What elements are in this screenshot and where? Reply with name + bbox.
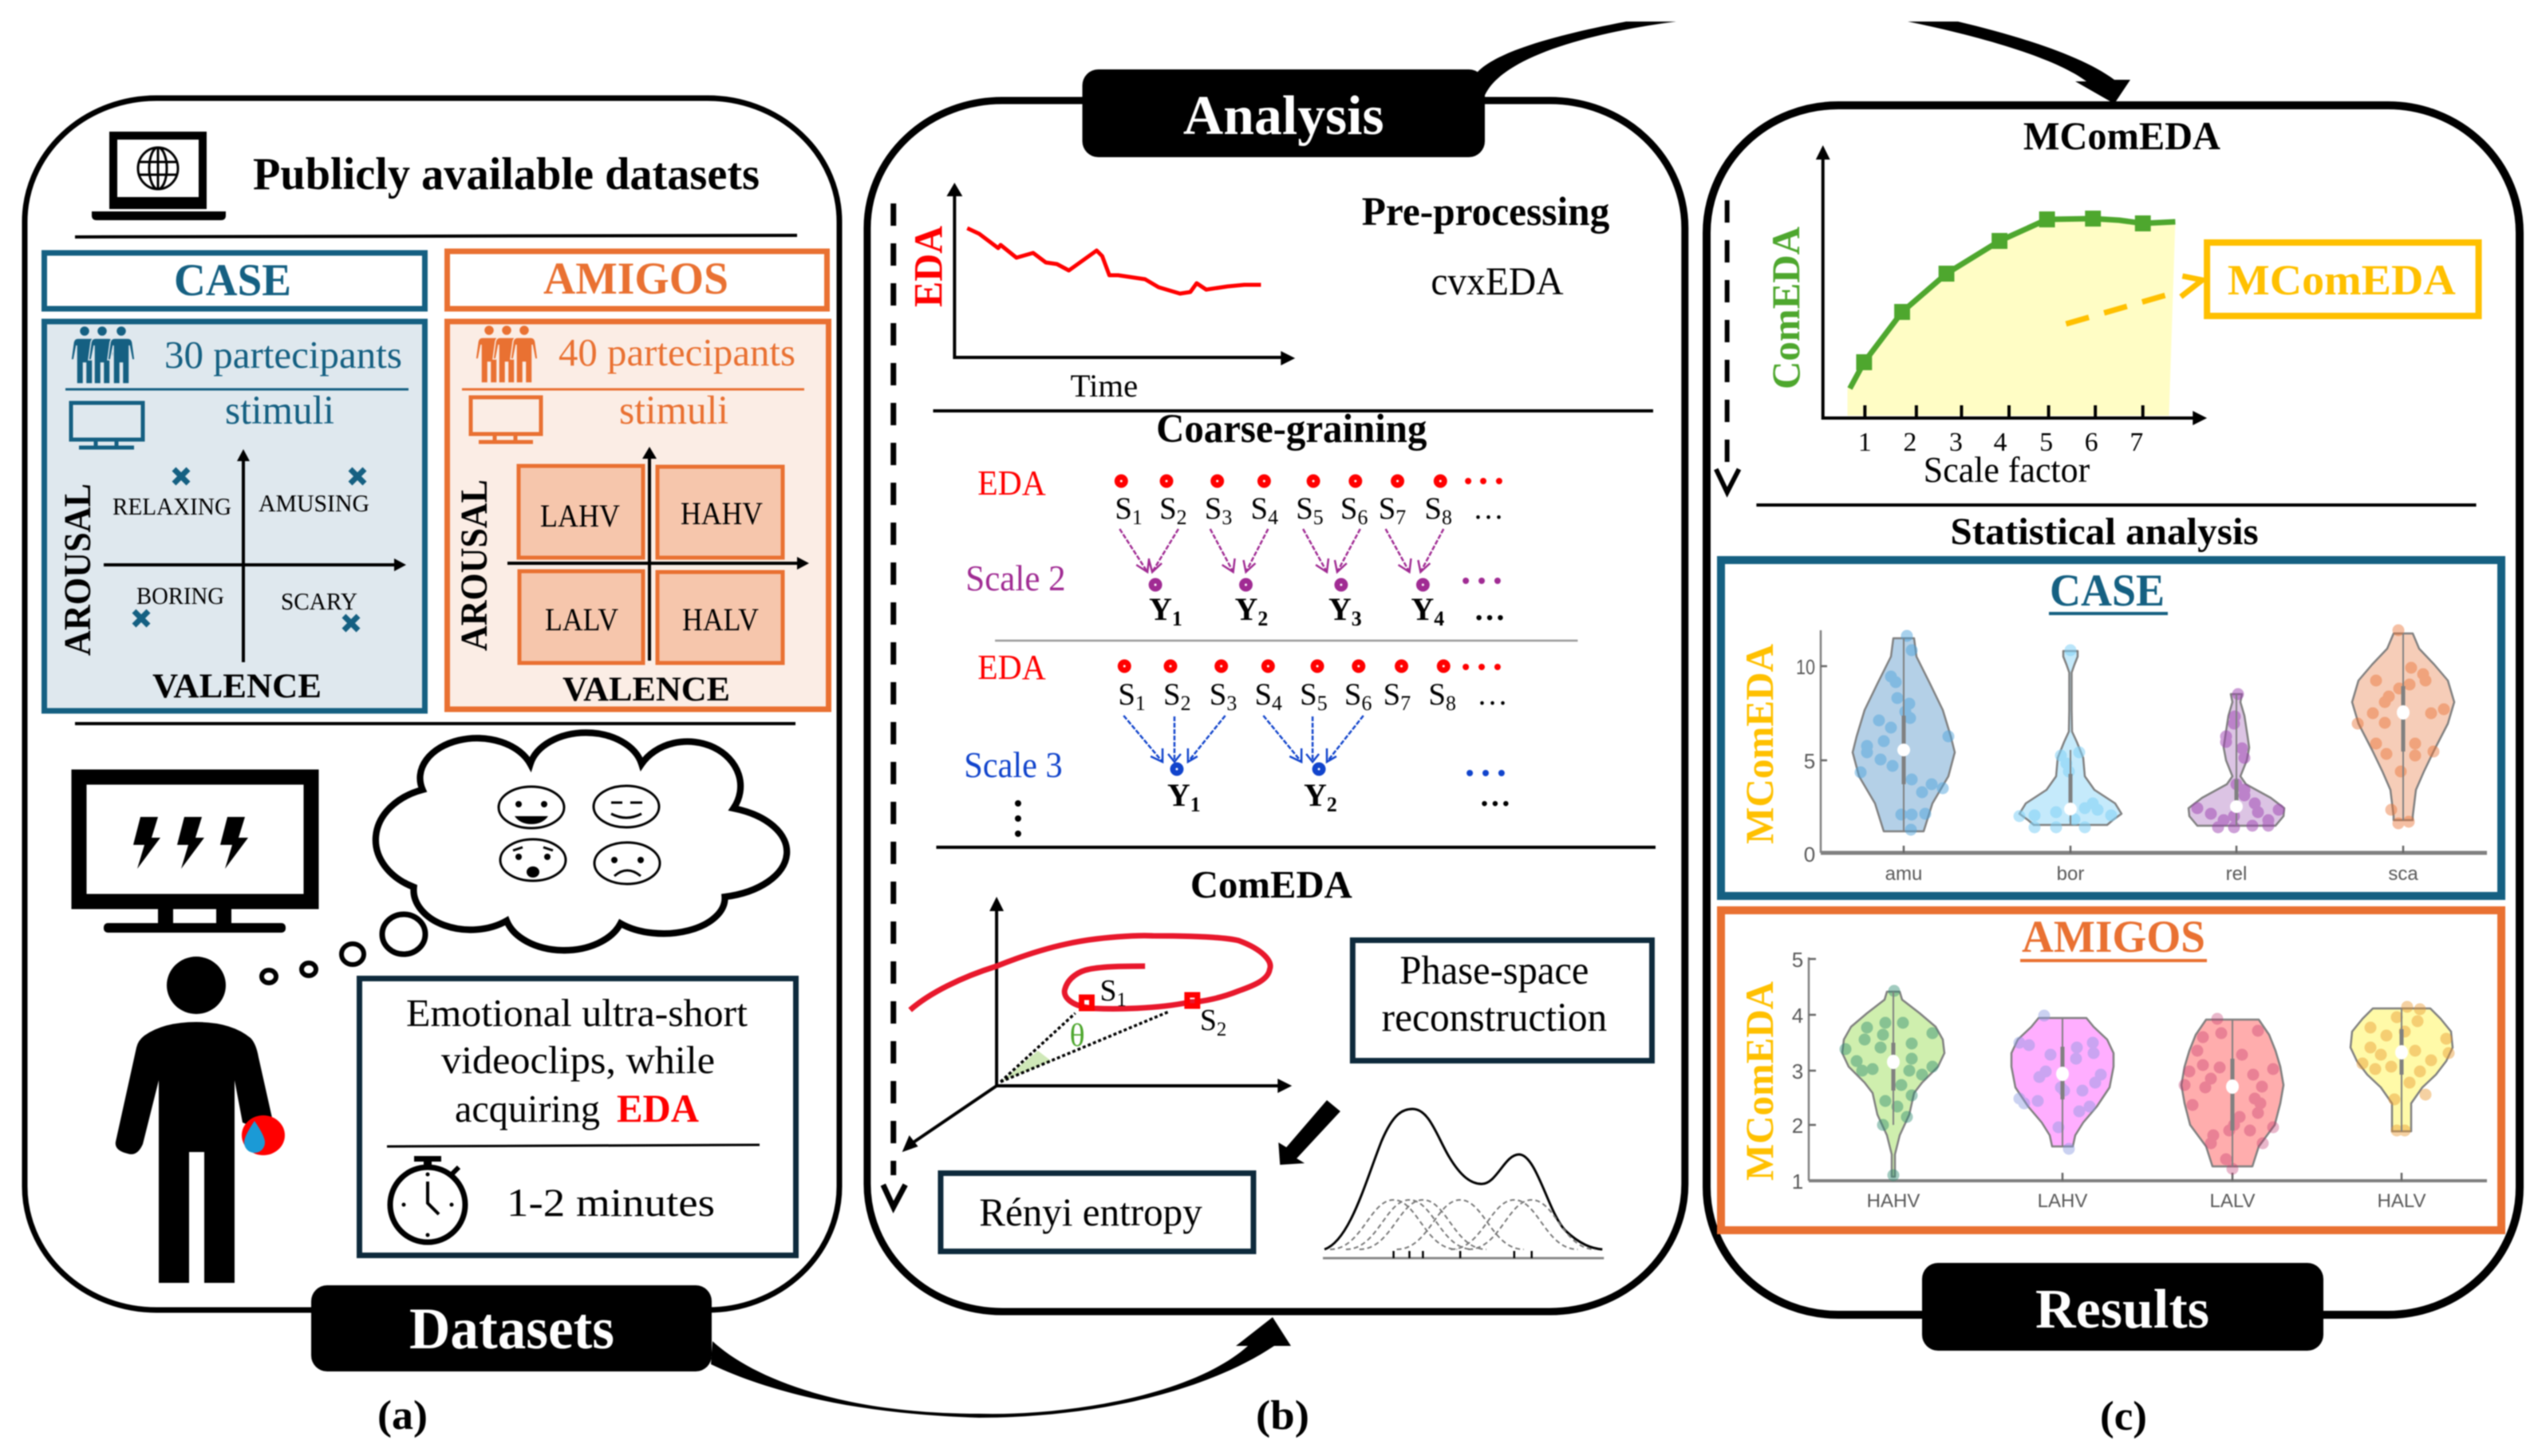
chart: phase-space trajectory: θ <box>1070 1017 1085 1053</box>
diagram: coarse-graining scale 2: 4 <box>1434 607 1444 630</box>
violin: LAHV <box>2011 1016 2114 1149</box>
violin: HALV <box>2351 1007 2453 1131</box>
diagram: coarse-graining scale 2: S <box>1159 491 1177 526</box>
violin: HAHV <box>1842 991 1944 1177</box>
chart: ComEDA across scale factors: 4 <box>1994 428 2007 457</box>
label: Datasets <box>311 1285 712 1371</box>
chart: ComEDA across scale factors: Scale factor <box>1924 450 2090 490</box>
section: MComEDA computation <box>1716 114 2479 553</box>
label: Datasets: Datasets <box>409 1296 614 1362</box>
box: phase-space reconstruction: Phase-space <box>1400 949 1589 993</box>
heading: pre-processing: Pre-processing <box>1362 190 1609 235</box>
panel: AMIGOS violin plots <box>1721 910 2501 1230</box>
chart: valence-arousal plane with stimuli classes: BORING <box>136 582 224 610</box>
diagram: coarse-graining scale 2: 5 <box>1313 506 1324 529</box>
box: CASE title <box>45 253 424 309</box>
arrow: area to MComEDA <box>2066 276 2202 324</box>
chart: ComEDA across scale factors: ComEDA <box>1764 227 1808 389</box>
label: Analysis <box>1083 69 1485 157</box>
chart: valence-arousal quadrants <box>453 447 809 708</box>
panel: CASE dataset <box>45 322 424 711</box>
chart axes: LALV <box>2210 1190 2255 1212</box>
diagram: coarse-graining scale 3: 5 <box>1317 692 1328 715</box>
heading: statistical analysis: Statistical analysis <box>1951 511 2259 553</box>
chart axes: 1 <box>1792 1170 1803 1194</box>
axis label: MComEDA: MComEDA <box>1737 981 1782 1181</box>
heading: publicly available datasets: Publicly available datasets <box>253 149 760 199</box>
chart axes: bor <box>2057 863 2084 885</box>
chart: valence-arousal plane with stimuli classes: AMUSING <box>259 489 369 517</box>
chart axes: sca <box>2388 863 2418 885</box>
chart: valence-arousal quadrants: AROUSAL <box>453 479 495 651</box>
diagram: coarse-graining scale 2: Y <box>1235 591 1257 627</box>
violin: bor <box>2019 650 2122 827</box>
chart: ComEDA across scale factors: 7 <box>2130 428 2143 457</box>
diagram: coarse-graining scale 2: 2 <box>1257 607 1268 630</box>
panel: AMIGOS dataset <box>447 322 828 709</box>
chart: phase-space trajectory: 2 <box>1217 1019 1226 1040</box>
diagram: coarse-graining scale 2: 6 <box>1358 506 1368 529</box>
diagram: coarse-graining scale 3: S <box>1344 677 1361 712</box>
heading: MComEDA: MComEDA <box>2023 114 2220 158</box>
diagram: coarse-graining scale 3: 7 <box>1400 692 1411 715</box>
caption: (a): (a) <box>377 1393 428 1438</box>
chart: kernel density estimate <box>1323 1109 1604 1258</box>
heading: AMIGOS: AMIGOS <box>2022 912 2205 962</box>
chart axes <box>1796 630 2487 885</box>
diagram: coarse-graining scale 2: 1 <box>1132 506 1143 529</box>
box: protocol description <box>359 978 796 1256</box>
icon: participants <box>476 326 538 383</box>
text: stimuli: stimuli <box>225 389 334 433</box>
diagram: coarse-graining scale 3: S <box>1254 677 1272 712</box>
diagram: coarse-graining scale 3: 4 <box>1272 692 1282 715</box>
chart: ComEDA across scale factors: 5 <box>2039 428 2053 457</box>
diagram: coarse-graining scale 2: S <box>1205 491 1222 526</box>
icon: stopwatch <box>390 1156 465 1242</box>
chart: valence-arousal plane with stimuli classes: VALENCE <box>152 668 322 705</box>
label: Results: Results <box>2035 1279 2209 1340</box>
diagram: coarse-graining scale 3: 8 <box>1446 692 1456 715</box>
chart: valence-arousal plane with stimuli classes: AROUSAL <box>57 483 99 656</box>
icon: thought bubbles <box>262 914 425 983</box>
diagram: coarse-graining scale 3: … <box>1477 677 1508 712</box>
chart: valence-arousal plane with stimuli classes: SCARY <box>281 587 357 615</box>
diagram: coarse-graining scale 3: S <box>1300 677 1317 712</box>
chart: EDA signal: Time <box>1071 368 1138 404</box>
diagram: coarse-graining scale 3: Y <box>1304 777 1327 813</box>
arrow: datasets to analysis <box>711 1317 1291 1418</box>
diagram: coarse-graining scale 3: … <box>1479 777 1511 813</box>
diagram: coarse-graining scale 2: Y <box>1149 591 1172 627</box>
icon: monitor with lightning bolts <box>79 777 311 933</box>
chart: valence-arousal quadrants: HALV <box>682 602 759 637</box>
chart axes: 4 <box>1792 1004 1803 1028</box>
label: Results <box>1922 1263 2323 1351</box>
chart axes: rel <box>2226 863 2247 885</box>
heading: ComEDA: ComEDA <box>1190 862 1352 906</box>
diagram: coarse-graining scale 3: 1 <box>1135 692 1146 715</box>
chart axes: LAHV <box>2038 1190 2087 1212</box>
diagram: coarse-graining scale 2: 7 <box>1395 506 1406 529</box>
diagram: coarse-graining scale 3: Scale 3 <box>964 745 1063 785</box>
arrow: pipeline flow <box>1716 200 1739 492</box>
chart: phase-space trajectory: S <box>1099 974 1116 1008</box>
box: protocol description: Emotional ultra-short <box>406 991 748 1035</box>
diagram: coarse-graining scale 3: S <box>1383 677 1400 712</box>
box: protocol description: acquiring <box>455 1087 600 1130</box>
diagram: coarse-graining scale 2: … <box>1474 591 1506 627</box>
chart axes <box>1792 948 2487 1212</box>
diagram: coarse-graining scale 2 <box>965 464 1506 630</box>
chart: EDA signal: EDA <box>907 226 951 307</box>
arrow: analysis to results (right part) <box>1908 22 2130 104</box>
diagram: coarse-graining scale 3 <box>964 649 1511 837</box>
chart axes: amu <box>1885 863 1922 885</box>
axis label: MComEDA: MComEDA <box>1737 644 1782 844</box>
diagram: coarse-graining scale 2: S <box>1296 491 1313 526</box>
chart: valence-arousal quadrants: VALENCE <box>562 671 730 708</box>
heading: CASE: CASE <box>2050 566 2165 616</box>
face: relaxed <box>594 786 659 827</box>
chart: valence-arousal quadrants: LALV <box>545 602 618 637</box>
box: Rényi entropy <box>941 1173 1253 1251</box>
label: Analysis: Analysis <box>1183 85 1384 147</box>
text: participants count: 30 partecipants <box>164 333 402 377</box>
diagram: coarse-graining scale 2: 3 <box>1222 506 1232 529</box>
diagram: coarse-graining scale 3: 6 <box>1361 692 1372 715</box>
text: cvxEDA: cvxEDA <box>1431 259 1564 303</box>
violin: LALV <box>2181 1019 2283 1169</box>
icon: participants <box>71 326 135 384</box>
chart axes: HAHV <box>1867 1190 1920 1212</box>
diagram: coarse-graining scale 3: Y <box>1167 777 1190 813</box>
text: stimuli: stimuli <box>619 389 728 433</box>
diagram: coarse-graining scale 2: 3 <box>1352 607 1362 630</box>
chart axes: 5 <box>1804 749 1815 773</box>
diagram: coarse-graining scale 2: Y <box>1411 591 1434 627</box>
chart: EDA signal <box>907 183 1295 404</box>
box: phase-space reconstruction: reconstruction <box>1382 996 1607 1040</box>
heading: coarse-graining: Coarse-graining <box>1156 407 1427 452</box>
diagram: coarse-graining scale 3: S <box>1428 677 1446 712</box>
icon: laptop with globe <box>92 136 226 220</box>
diagram: coarse-graining scale 2: S <box>1424 491 1442 526</box>
icon: thought cloud with emotions <box>376 732 787 950</box>
diagram: coarse-graining scale 2: 4 <box>1268 506 1278 529</box>
chart axes: 5 <box>1792 948 1803 972</box>
diagram: coarse-graining scale 3: 1 <box>1190 793 1201 816</box>
diagram: coarse-graining scale 2: S <box>1115 491 1132 526</box>
arrow: to density estimation <box>1278 1100 1340 1165</box>
chart: valence-arousal quadrants: LAHV <box>540 498 620 534</box>
diagram: coarse-graining scale 2: … <box>1473 491 1504 526</box>
text: participants count: 40 partecipants <box>559 330 795 374</box>
box: MComEDA index: MComEDA <box>2228 256 2456 304</box>
chart axes: 0 <box>1804 842 1815 866</box>
diagram: coarse-graining scale 2: 2 <box>1177 506 1187 529</box>
box: phase-space reconstruction <box>1352 940 1652 1061</box>
diagram: coarse-graining scale 2: EDA <box>977 464 1046 503</box>
box: MComEDA index <box>2207 243 2479 316</box>
arrow: analysis to results (left part) <box>1478 22 1676 97</box>
icon: person with EDA sensor <box>116 957 285 1283</box>
chart axes: 2 <box>1792 1114 1803 1138</box>
diagram: coarse-graining scale 2: Scale 2 <box>965 558 1066 598</box>
chart: ComEDA across scale factors: 2 <box>1903 428 1916 457</box>
chart: valence-arousal quadrants: HAHV <box>681 495 763 531</box>
diagram: coarse-graining scale 3: S <box>1163 677 1181 712</box>
chart: ComEDA across scale factors: 1 <box>1858 428 1872 457</box>
diagram: coarse-graining scale 3: S <box>1210 677 1226 712</box>
chart: ComEDA across scale factors: 3 <box>1949 428 1963 457</box>
diagram: coarse-graining scale 2: S <box>1379 491 1395 526</box>
box: AMIGOS title <box>447 251 827 309</box>
diagram: coarse-graining scale 2: Y <box>1328 591 1352 627</box>
box: protocol description: videoclips, while <box>441 1038 715 1082</box>
diagram: coarse-graining scale 3: 2 <box>1181 692 1191 715</box>
box: protocol description: EDA <box>617 1086 699 1130</box>
chart: valence-arousal plane with stimuli classes <box>57 449 406 705</box>
face: scared <box>500 839 566 881</box>
face: bored <box>594 842 660 884</box>
box: protocol description: 1-2 minutes <box>507 1180 715 1225</box>
diagram: coarse-graining scale 2: 1 <box>1172 607 1182 630</box>
chart: phase-space trajectory: S <box>1200 1004 1217 1037</box>
arrow: pipeline flow <box>883 203 906 1207</box>
diagram: coarse-graining scale 2: 8 <box>1442 506 1452 529</box>
diagram: coarse-graining scale 2: S <box>1250 491 1268 526</box>
chart axes: 3 <box>1792 1059 1803 1083</box>
chart axes: 10 <box>1796 655 1815 679</box>
caption: (c): (c) <box>2100 1394 2147 1439</box>
violin: rel <box>2189 694 2284 827</box>
panel: CASE violin plots <box>1721 560 2501 896</box>
diagram: coarse-graining scale 3: EDA <box>977 649 1046 687</box>
panel: datasets <box>25 98 839 1310</box>
box: AMIGOS title: AMIGOS <box>543 254 728 304</box>
caption: (b): (b) <box>1256 1393 1309 1438</box>
chart: phase-space trajectory <box>902 897 1292 1152</box>
diagram: coarse-graining scale 2: S <box>1340 491 1358 526</box>
chart: phase-space trajectory: 1 <box>1116 989 1127 1011</box>
box: CASE title: CASE <box>174 255 291 306</box>
diagram: coarse-graining scale 3: S <box>1118 677 1135 712</box>
chart: valence-arousal plane with stimuli classes: RELAXING <box>112 492 231 520</box>
diagram: coarse-graining scale 3: 3 <box>1226 692 1237 715</box>
violin: amu <box>1853 636 1955 831</box>
violin: sca <box>2352 630 2454 823</box>
diagram: coarse-graining scale 3: 2 <box>1327 793 1337 816</box>
panel: analysis <box>867 101 1685 1312</box>
chart: ComEDA across scale factors: 6 <box>2085 428 2098 457</box>
box: Rényi entropy: Rényi entropy <box>979 1190 1202 1234</box>
face: amused <box>499 787 564 828</box>
chart: ComEDA across scale factors <box>1764 145 2207 490</box>
panel: results <box>1707 105 2520 1315</box>
icon: stimuli monitor <box>471 397 541 442</box>
icon: stimuli monitor <box>71 403 143 448</box>
chart axes: HALV <box>2378 1190 2426 1212</box>
